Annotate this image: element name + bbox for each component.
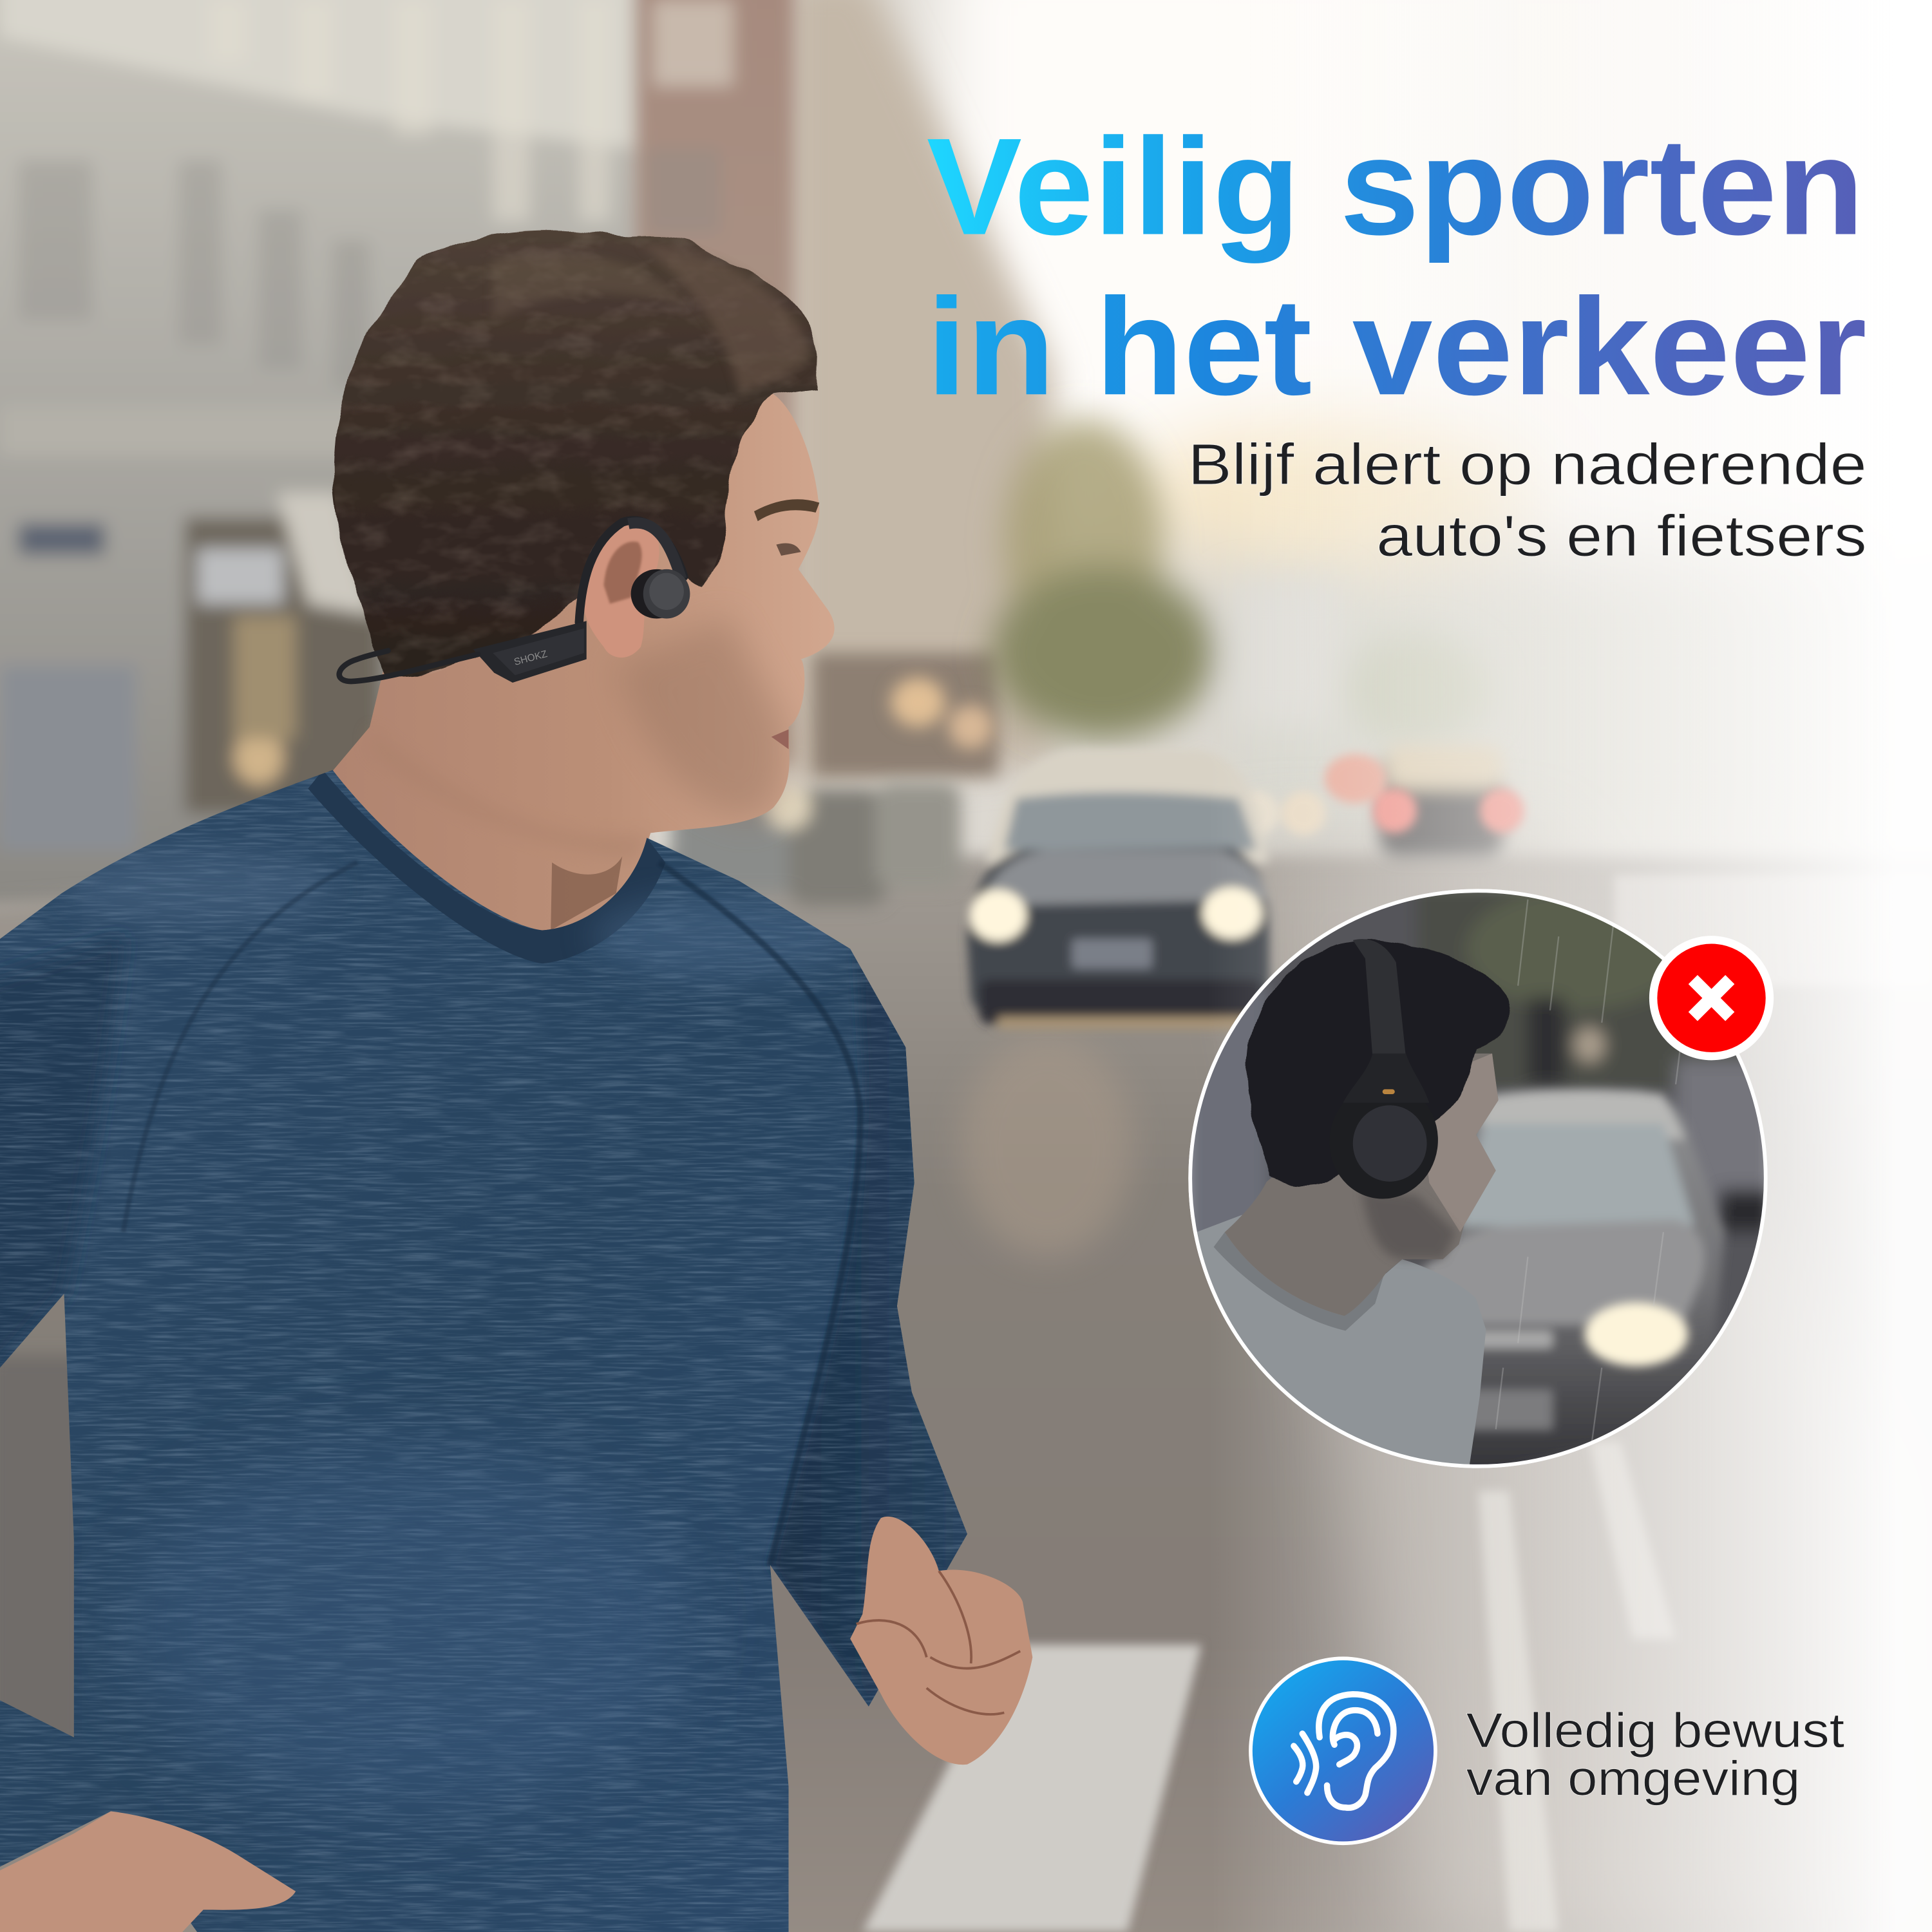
bone conduction headset: SHOKZ [513, 649, 549, 668]
inset car [1417, 1089, 1725, 1484]
right fist [850, 1517, 1032, 1765]
left hand [0, 1811, 296, 1932]
distant cars [672, 677, 1503, 905]
inset neck and face [1225, 1054, 1499, 1316]
caption: fully aware of surroundings [1466, 1703, 1844, 1806]
inset rain [1496, 900, 1688, 1442]
caption: fully aware of surroundings: Volledig bewust [1466, 1703, 1844, 1758]
inset headphones [1322, 939, 1445, 1206]
ear [583, 524, 659, 658]
inset hair [1248, 940, 1510, 1186]
red cross badge [1649, 936, 1774, 1060]
caption: fully aware of surroundings: van omgeving [1466, 1752, 1800, 1806]
inset: man with over-ear headphones in rain [1183, 881, 1774, 1484]
subtitle [1188, 433, 1867, 569]
running man [0, 216, 1032, 1932]
subtitle: auto's en fietsers [1376, 504, 1867, 569]
long sleeve shirt [0, 764, 986, 1932]
neck and face [330, 392, 835, 933]
title [927, 110, 1867, 424]
bone conduction headset [339, 520, 690, 683]
tree [992, 419, 1491, 746]
road [0, 857, 1932, 1932]
inset background street [1183, 881, 1774, 1484]
title: Veilig sporten [927, 110, 1864, 264]
main blurred car [967, 749, 1269, 1029]
road markings [862, 875, 1932, 1932]
inset shirt [1183, 1215, 1486, 1479]
hair [320, 216, 826, 684]
buildings [0, 0, 998, 912]
icon: ear with sound waves [1249, 1656, 1437, 1845]
title: in het verkeer [927, 270, 1867, 424]
subtitle: Blijf alert op naderende [1188, 433, 1867, 497]
sky and warm haze [936, 0, 1932, 850]
far beige building [788, 0, 1054, 788]
